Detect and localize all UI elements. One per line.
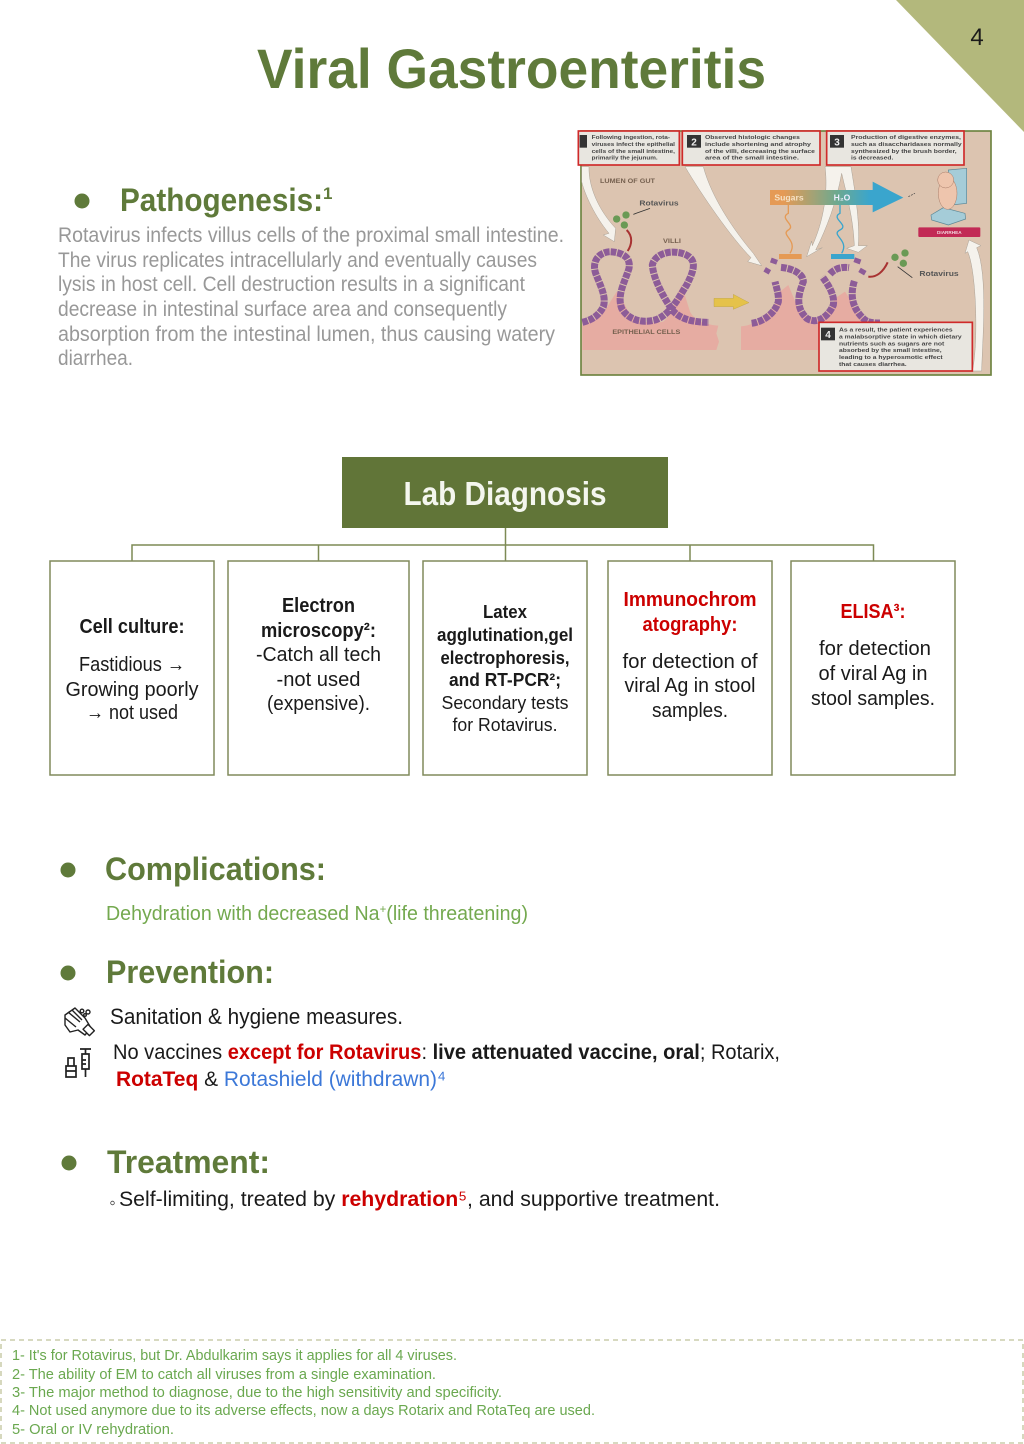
box: latex agglutination: agglutination,gel [437, 625, 573, 645]
icon: washing hands [65, 1008, 94, 1036]
corner triangle with page number: 4 [970, 24, 984, 51]
figure: rotavirus pathogenesis diagram: H₂O [834, 193, 850, 202]
patient on toilet [931, 168, 967, 225]
footnotes box: 5- Oral or IV rehydration. [12, 1422, 174, 1438]
text: vaccines line 1: No vaccines except for Rotavirus: live attenuated vaccine, oral; Rotarix, [113, 1040, 780, 1064]
step 2 callout: area of the small intestine. [705, 156, 800, 162]
box: elisa [791, 561, 955, 775]
box: immunochromatography: Immunochrom [624, 589, 756, 611]
step 4 callout: 4 [825, 330, 831, 341]
heading: prevention: Prevention: [106, 954, 274, 990]
box: electron microscopy: -not used [276, 669, 360, 691]
box: latex agglutination: and RT-PCR²; [449, 670, 561, 690]
absorption squiggles [785, 205, 844, 253]
box: immunochromatography: viral Ag in stool [624, 675, 756, 697]
diarrhea label [918, 227, 980, 237]
box: electron microscopy: (expensive). [267, 693, 370, 715]
text: sanitation: Sanitation & hygiene measures. [110, 1004, 403, 1029]
step 4 callout: absorbed by the small intestine, [839, 348, 942, 354]
footnotes box: 3- The major method to diagnose, due to the high sensitivity and specificity. [12, 1385, 502, 1401]
heading: treatment: Treatment: [107, 1144, 270, 1180]
white callout arrows [582, 167, 984, 371]
step 1 callout: cells of the small intestine, [592, 149, 676, 155]
box: immunochromatography: atography: [642, 614, 738, 636]
corner triangle with page number [896, 0, 1024, 132]
text: vaccines line 2: RotaTeq & Rotashield (withdrawn)⁴ [116, 1067, 446, 1091]
yellow arrow [714, 294, 749, 309]
footnotes box [1, 1340, 1023, 1443]
villi cell chains [582, 252, 880, 323]
box: cell culture: Fastidious → [79, 654, 185, 676]
box: electron microscopy [228, 561, 409, 775]
box: latex agglutination [423, 561, 587, 775]
step 1 callout: primarily the jejunum. [592, 156, 658, 162]
step 1 callout: Following ingestion, rota- [592, 135, 670, 141]
box: electron microscopy: Electron [282, 595, 355, 617]
lab diagnosis header: Lab Diagnosis [404, 475, 606, 512]
box: immunochromatography: samples. [652, 700, 728, 722]
text: treatment: Self-limiting, treated by rehydration⁵, and supportive treatment. [119, 1187, 720, 1211]
footnotes box: 2- The ability of EM to catch all viruses from a single examination. [12, 1367, 436, 1383]
diagram labels: VILLI [663, 238, 681, 245]
virus clusters [613, 211, 909, 267]
diagram labels: LUMEN OF GUT [600, 178, 655, 185]
diagram labels: Rotavirus [639, 199, 679, 208]
heading: pathogenesis: 1 [323, 184, 332, 203]
step 3 callout [827, 131, 964, 165]
footnotes box: 4- Not used anymore due to its adverse effects, now a days Rotarix and RotaTeq are used. [12, 1403, 595, 1419]
text: complications: Dehydration with decreased Na [106, 902, 392, 925]
text block: pathogenesis [58, 224, 564, 370]
step 4 callout: nutrients such as sugars are not [839, 341, 945, 347]
box: elisa: stool samples. [811, 688, 935, 710]
box: immunochromatography: for detection of [622, 651, 758, 673]
step 1 callout [578, 131, 679, 165]
figure: rotavirus pathogenesis diagram [578, 131, 991, 375]
box: latex agglutination: Latex [483, 602, 527, 622]
text block: pathogenesis: The virus replicates intracellularly and eventually causes [58, 249, 537, 272]
box: electron microscopy: -Catch all tech [256, 644, 381, 666]
step 3 callout: synthesized by the brush border, [851, 149, 957, 155]
step 4 callout: As a result, the patient experiences [839, 328, 953, 334]
box: cell culture: Cell culture: [80, 616, 184, 638]
box: latex agglutination: electrophoresis, [440, 648, 570, 668]
step 2 callout [682, 131, 820, 165]
diagram labels: EPITHELIAL CELLS [612, 329, 681, 336]
figure: rotavirus pathogenesis diagram: Sugars [774, 193, 804, 202]
box: cell culture: → not used [86, 702, 178, 724]
title: Viral Gastroenteritis [257, 37, 766, 100]
box: cell culture [50, 561, 214, 775]
step 3 callout: Production of digestive enzymes, [851, 135, 962, 141]
box: latex agglutination: for Rotavirus. [452, 715, 558, 735]
step 2 callout: of the villi, decreasing the surface [705, 149, 815, 155]
diagram labels: Rotavirus [919, 269, 959, 278]
box: latex agglutination: Secondary tests [442, 693, 568, 713]
step 2 callout: 2 [691, 137, 697, 148]
heading: pathogenesis: Pathogenesis: [120, 182, 323, 218]
step 4 callout: that causes diarrhea. [839, 362, 907, 368]
lab diagnosis header [342, 457, 668, 528]
footnotes box: 1- It's for Rotavirus, but Dr. Abdulkarim says it applies for all 4 viruses. [12, 1348, 457, 1364]
text block: pathogenesis: absorption from the intestinal lumen, thus causing watery [58, 323, 555, 346]
box: immunochromatography [608, 561, 772, 775]
box: elisa: ELISA³: [840, 601, 906, 623]
diarrhea label: DIARRHEA [937, 230, 962, 235]
step 4 callout: a malabsorptive state in which dietary [839, 335, 962, 341]
box: electron microscopy: microscopy²: [261, 620, 376, 642]
tree connectors [132, 528, 874, 561]
box: cell culture: Growing poorly [66, 679, 198, 701]
text block: pathogenesis: lysis in host cell. Cell destruction results in a significant [58, 273, 525, 296]
step 4 callout [819, 322, 972, 371]
box: elisa: of viral Ag in [818, 663, 928, 685]
text block: pathogenesis: Rotavirus infects villus cells of the proximal small intestine. [58, 224, 564, 247]
diagram labels [600, 178, 959, 336]
step 2 callout: include shortening and atrophy [705, 142, 811, 148]
text: complications: (life threatening) [386, 902, 528, 925]
step 2 callout: Observed histologic changes [705, 135, 800, 141]
flow arrow: sugars and water [770, 182, 903, 212]
text block: pathogenesis: diarrhea. [58, 347, 133, 370]
text block: pathogenesis: decrease in intestinal surface area and consequently [58, 298, 507, 321]
heading: complications: Complications: [105, 851, 326, 887]
step 3 callout: is decreased. [851, 156, 894, 162]
icon: vaccine syringe and vial [66, 1049, 91, 1077]
box: elisa: for detection [819, 638, 931, 660]
epithelial tissue [582, 285, 882, 350]
step 1 callout: viruses infect the epithelial [592, 142, 676, 148]
step 3 callout: 3 [834, 137, 840, 148]
step 4 callout: leading to a hyperosmotic effect [839, 355, 943, 361]
text: complications: + [380, 902, 386, 916]
step 3 callout: such as disaccharidases normally [851, 142, 962, 148]
